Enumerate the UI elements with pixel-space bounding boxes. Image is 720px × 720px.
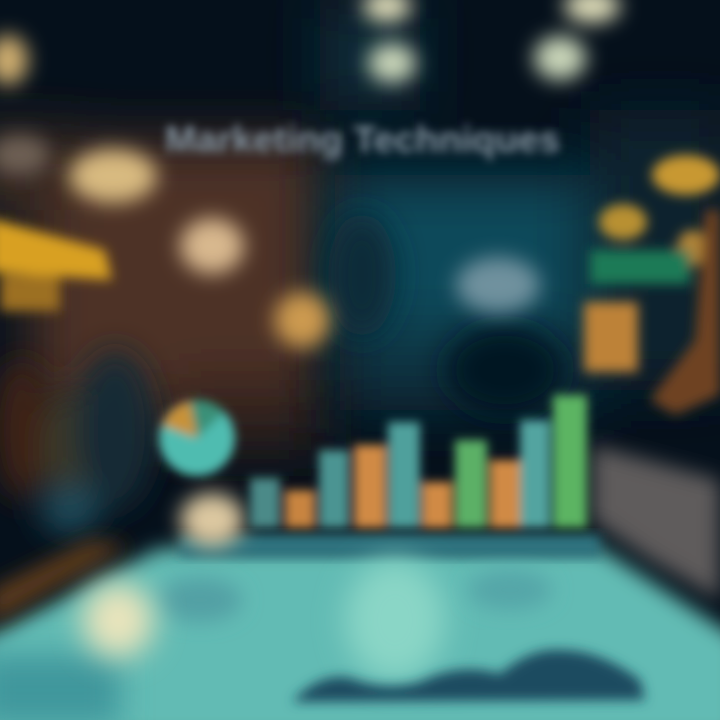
pie chart — [159, 400, 235, 476]
yellow awning left — [0, 218, 112, 311]
background: central teal wall — [320, 0, 720, 410]
left floor edge — [0, 540, 130, 625]
cloud shape — [456, 257, 540, 313]
glow on table — [82, 582, 154, 658]
title: Marketing Techniques — [165, 119, 560, 160]
bar chart — [250, 395, 587, 528]
background: left brown interior — [0, 130, 320, 450]
right lower counter — [592, 445, 720, 600]
dark hill shapes — [292, 650, 645, 702]
glow under pie — [180, 493, 244, 547]
ceiling and wall lights — [0, 0, 620, 348]
right side decor — [584, 155, 720, 415]
dark shapes on wall — [0, 213, 565, 535]
floor table — [0, 535, 720, 720]
